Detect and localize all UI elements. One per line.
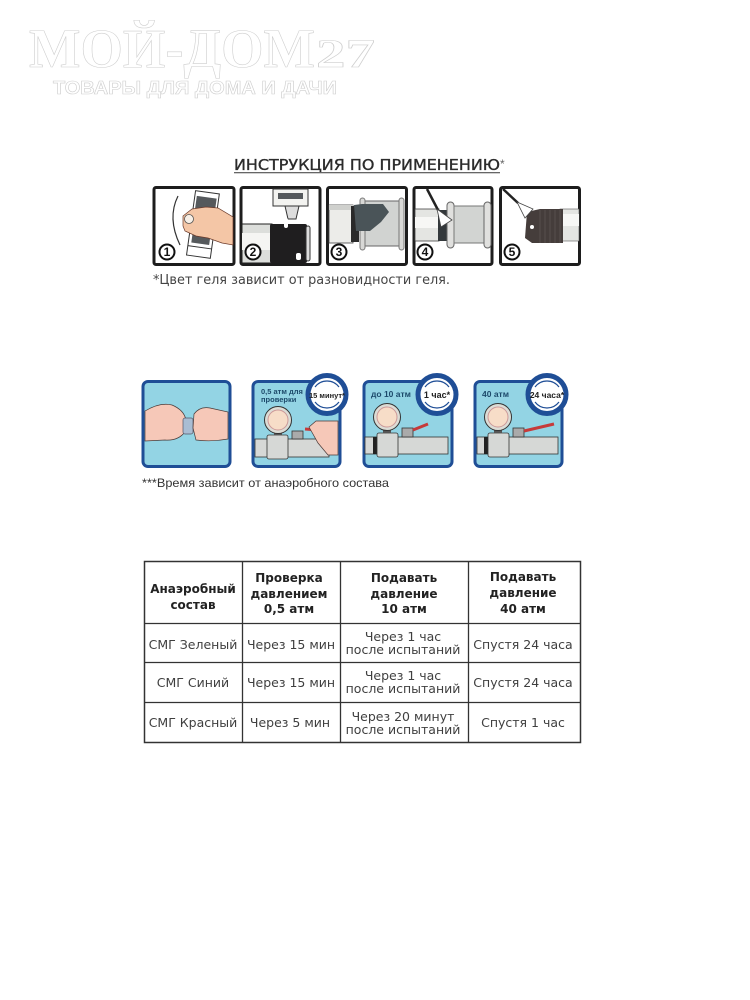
table: anaerobic compositions: Спустя 1 час [481,715,565,730]
table: anaerobic compositions: 40 атм [500,602,546,616]
panel: step 4: 4 [422,245,429,259]
footnote: gel colour: *Цвет геля зависит от разновидности геля. [153,273,450,288]
panel: step 4 [414,188,492,264]
panel: step 1 [154,188,234,264]
table: anaerobic compositions: Подавать [490,570,557,584]
panel: step 5 [500,188,580,264]
panel: pressure 0.5 atm [253,376,346,466]
table: anaerobic compositions: 10 атм [381,602,427,616]
table: anaerobic compositions: после испытаний [346,642,460,657]
panel: step 1: 1 [164,245,171,259]
table: anaerobic compositions: Через 5 мин [250,715,330,730]
panel: pressure 40 atm: 40 атм [482,389,509,399]
table: anaerobic compositions: Через 1 час [365,629,441,644]
table: anaerobic compositions: давление [489,586,557,600]
panel: pressure 10 atm [364,376,456,466]
panel: pressure 10 atm: 1 час* [424,390,451,400]
table: anaerobic compositions: Подавать [371,571,438,585]
table: anaerobic compositions: СМГ Зеленый [149,637,237,652]
heading: instructions: * [500,157,505,171]
table: anaerobic compositions: 0,5 атм [264,602,314,616]
heading: instructions: ИНСТРУКЦИЯ ПО ПРИМЕНЕНИЮ [234,156,500,174]
table: anaerobic compositions: Через 20 минут [352,709,454,724]
logo watermark [29,18,375,98]
table: anaerobic compositions: Спустя 24 часа [473,637,573,652]
panel: pressure 40 atm: 24 часа* [530,390,565,400]
panel: step 2: 2 [250,245,257,259]
table: anaerobic compositions: состав [170,598,216,612]
panel: pressure 0.5 atm: 15 минут* [309,391,345,400]
table: anaerobic compositions: после испытаний [346,722,460,737]
table: anaerobic compositions: Через 15 мин [247,637,335,652]
logo watermark: 27 [316,31,375,76]
panel: step 2 [241,188,320,264]
table: anaerobic compositions: давлением [251,587,327,601]
table: anaerobic compositions: СМГ Синий [157,675,229,690]
logo watermark: МОЙ-ДОМ [29,18,315,79]
panel: step 3 [328,188,406,264]
panel: pressure 40 atm [475,376,566,466]
table: anaerobic compositions [144,562,580,742]
table: anaerobic compositions: Проверка [255,571,323,585]
table: anaerobic compositions: после испытаний [346,681,460,696]
table: anaerobic compositions: Анаэробный [150,582,236,596]
panel: step 3: 3 [336,245,343,259]
logo watermark: ТОВАРЫ ДЛЯ ДОМА И ДАЧИ [53,78,337,98]
table: anaerobic compositions: Через 15 мин [247,675,335,690]
panel: pressure 0.5 atm: проверки [261,395,297,404]
table: anaerobic compositions: Через 1 час [365,668,441,683]
table: anaerobic compositions: СМГ Красный [149,715,237,730]
table: anaerobic compositions: давление [370,587,438,601]
panel: step 5: 5 [509,245,516,259]
table: anaerobic compositions: Спустя 24 часа [473,675,573,690]
panel: hands clamp [143,382,230,466]
panel: pressure 0.5 atm: 0,5 атм для [261,387,303,396]
footnote: anaerobic time: ***Время зависит от анаэробного состава [142,476,389,490]
panel: pressure 10 atm: до 10 атм [371,389,411,399]
